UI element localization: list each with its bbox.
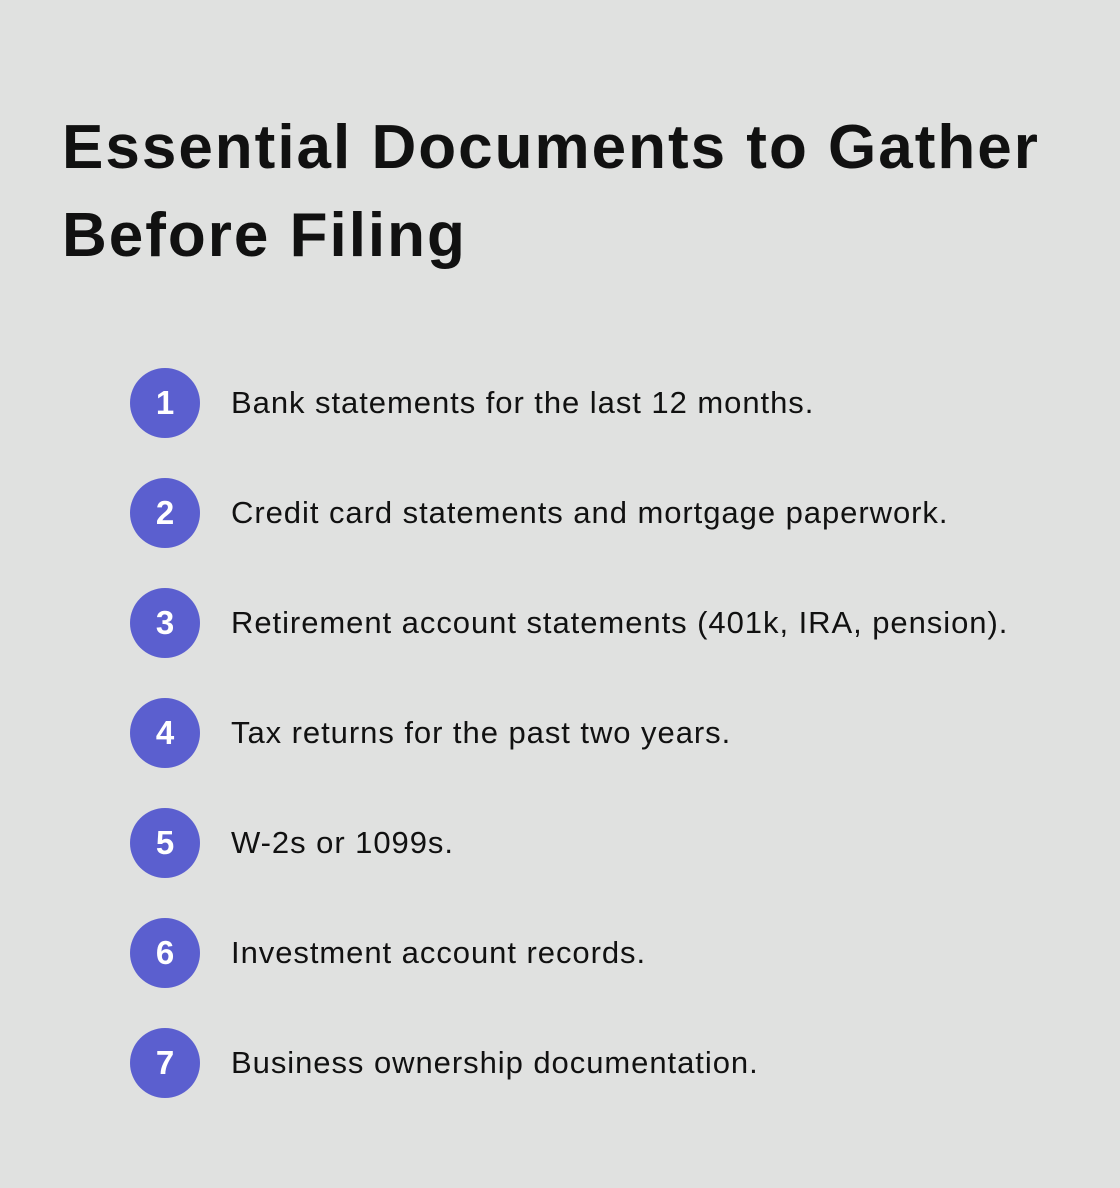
list item 7 xyxy=(130,1028,759,1098)
number badge 4: 4 xyxy=(156,714,174,751)
title xyxy=(62,113,1040,270)
number badge 1: 1 xyxy=(156,384,174,421)
list item 1 xyxy=(130,368,814,438)
item text 3: Retirement account statements (401k, IRA, pension). xyxy=(231,605,1008,640)
title: Before Filing xyxy=(62,201,467,270)
number badge 7: 7 xyxy=(156,1044,174,1081)
number badge 6 xyxy=(130,918,200,988)
item text 7: Business ownership documentation. xyxy=(231,1045,759,1080)
number badge 4 xyxy=(130,698,200,768)
item text 6: Investment account records. xyxy=(231,935,646,970)
list item 4 xyxy=(130,698,731,768)
number badge 2 xyxy=(130,478,200,548)
list item 5 xyxy=(130,808,454,878)
number badge 7 xyxy=(130,1028,200,1098)
item text 5: W-2s or 1099s. xyxy=(231,825,454,860)
number badge 6: 6 xyxy=(156,934,174,971)
item text 1: Bank statements for the last 12 months. xyxy=(231,385,814,420)
number badge 1 xyxy=(130,368,200,438)
number badge 3: 3 xyxy=(156,604,174,641)
list item 2 xyxy=(130,478,948,548)
title: Essential Documents to Gather xyxy=(62,113,1040,182)
number badge 5 xyxy=(130,808,200,878)
list item 3 xyxy=(130,588,1008,658)
item text 4: Tax returns for the past two years. xyxy=(231,715,731,750)
item text 2: Credit card statements and mortgage paperwork. xyxy=(231,495,948,530)
number badge 3 xyxy=(130,588,200,658)
number badge 5: 5 xyxy=(156,824,174,861)
number badge 2: 2 xyxy=(156,494,174,531)
list item 6 xyxy=(130,918,646,988)
